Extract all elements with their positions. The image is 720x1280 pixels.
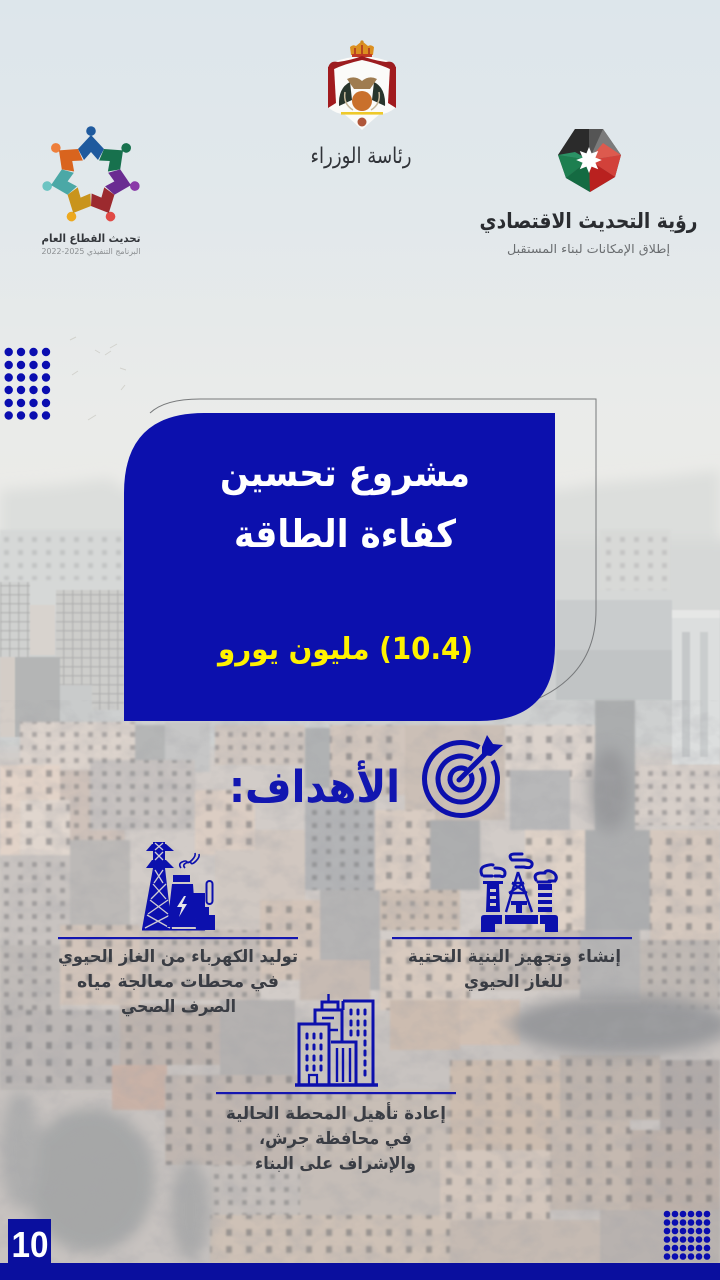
card background <box>124 413 555 721</box>
project title <box>220 451 470 556</box>
objective text: للغاز الحيوي <box>464 972 563 992</box>
decorative dots: top left <box>4 348 50 420</box>
decorative dots: bottom right <box>664 1211 710 1260</box>
distant birds <box>70 337 126 420</box>
project title: مشروع تحسين <box>220 451 470 496</box>
mid-town houses <box>0 530 720 1263</box>
divider <box>58 937 298 939</box>
icon: coat of arms <box>328 40 396 130</box>
objective text <box>58 947 298 1017</box>
objective text: إعادة تأهيل المحطة الحالية <box>226 1102 446 1124</box>
objective text: الصرف الصحي <box>121 997 236 1017</box>
objective text: والإشراف على البناء <box>255 1154 416 1174</box>
logo title: رؤية التحديث الاقتصادي <box>480 209 698 234</box>
icon: power plant <box>142 842 215 930</box>
logo title: تحديث القطاع العام <box>42 232 140 245</box>
page number: 10 <box>12 1224 48 1265</box>
logo subtitle: البرنامج التنفيذي 2025-2022 <box>42 247 140 256</box>
icon: target with arrow <box>424 735 503 816</box>
footer bar <box>0 1263 720 1280</box>
right tower <box>672 610 720 765</box>
logo subtitle: إطلاق الإمكانات لبناء المستقبل <box>507 242 670 256</box>
project title: كفاءة الطاقة <box>234 512 457 556</box>
icon: refinery <box>481 854 558 932</box>
dark tree masses <box>0 748 720 1260</box>
divider <box>216 1092 456 1094</box>
icon: faceted Jordan flag polygon <box>558 129 621 192</box>
card outline <box>150 399 596 705</box>
left towers <box>0 582 720 765</box>
logo: public sector modernization <box>40 126 142 256</box>
objective: electricity from biogas <box>58 842 298 1017</box>
objective text: في محطات معالجة مياه <box>77 972 279 992</box>
far hills <box>0 470 720 800</box>
objective text <box>226 1102 446 1174</box>
icon: buildings <box>295 994 378 1085</box>
objective text: إنشاء وتجهيز البنية التحتية <box>408 947 621 967</box>
divider <box>392 937 632 939</box>
objective text: في محافظة جرش، <box>259 1129 412 1149</box>
objective: rehabilitate existing station <box>216 994 456 1174</box>
photo grain <box>0 700 720 1263</box>
project budget: (10.4) مليون يورو <box>216 632 473 667</box>
icon: seven-figure ring <box>40 126 142 227</box>
objective text: توليد الكهرباء من الغاز الحيوي <box>58 947 298 967</box>
objective text <box>408 947 621 992</box>
heading: objectives: الأهداف: <box>229 760 400 813</box>
panel: project title card <box>124 399 596 721</box>
objective: biogas infrastructure <box>392 854 632 992</box>
logo: prime ministry emblem <box>310 40 412 169</box>
calligraphy: prime ministry: رئاسة الوزراء <box>310 144 412 169</box>
logo: economic modernization vision <box>480 129 698 256</box>
